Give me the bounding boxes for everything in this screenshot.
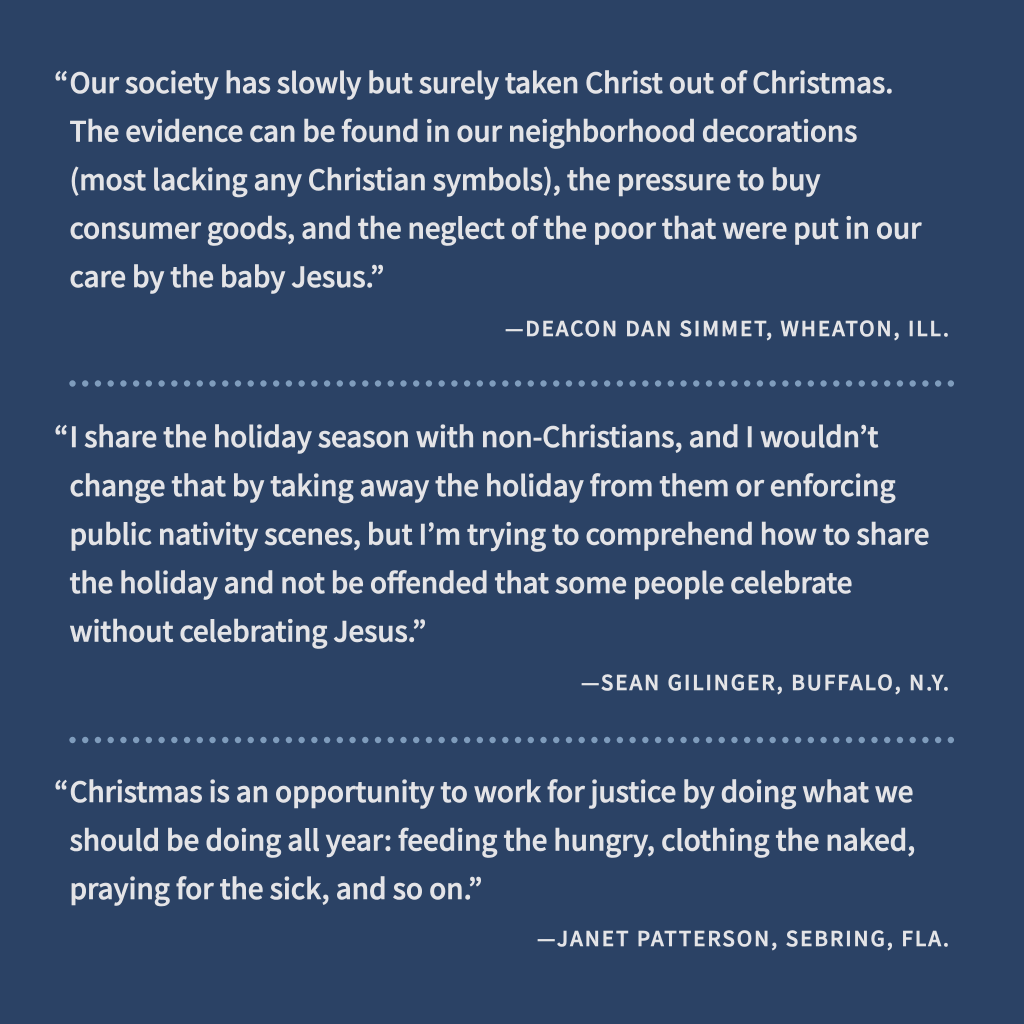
quote 2 text: “ [54, 416, 69, 456]
quote 1 text: “ [54, 62, 69, 102]
quote block 2 [54, 416, 949, 696]
quote 2 text [54, 416, 930, 650]
quote 1 text: care by the baby Jesus.” [70, 256, 384, 296]
quote 2 text: I share the holiday season with non-Christians, and I wouldn’t [70, 416, 878, 456]
quote 2 attribution: —SEAN GILINGER, BUFFALO, N.Y. [581, 666, 949, 696]
quote 3 text: “ [54, 771, 69, 811]
quote 1 text: (most lacking any Christian symbols), the pressure to buy [70, 159, 820, 199]
quote 3 text [54, 771, 916, 908]
quote 3 attribution: —JANET PATTERSON, SEBRING, FLA. [537, 922, 949, 952]
quote 3 text: should be doing all year: feeding the hungry, clothing the naked, [70, 820, 916, 860]
quote 2 text: without celebrating Jesus.” [70, 610, 426, 650]
quote 2 text: change that by taking away the holiday from them or enforcing [70, 465, 896, 505]
quote block 3 [54, 771, 949, 952]
quote 2 text: public nativity scenes, but I’m trying to comprehend how to share [70, 514, 930, 554]
quote 1 text: consumer goods, and the neglect of the poor that were put in our [70, 208, 922, 248]
quote 3 text: Christmas is an opportunity to work for justice by doing what we [70, 771, 914, 811]
quote 1 attribution: —DEACON DAN SIMMET, WHEATON, ILL. [505, 312, 949, 342]
quote 2 text: the holiday and not be offended that some people celebrate [70, 562, 852, 602]
quote 3 text: praying for the sick, and so on.” [70, 868, 482, 908]
quote 1 text: The evidence can be found in our neighborhood decorations [70, 110, 858, 150]
quote 1 text: Our society has slowly but surely taken Christ out of Christmas. [70, 62, 894, 102]
quote block 1 [54, 62, 949, 342]
quote 1 text [54, 62, 922, 296]
